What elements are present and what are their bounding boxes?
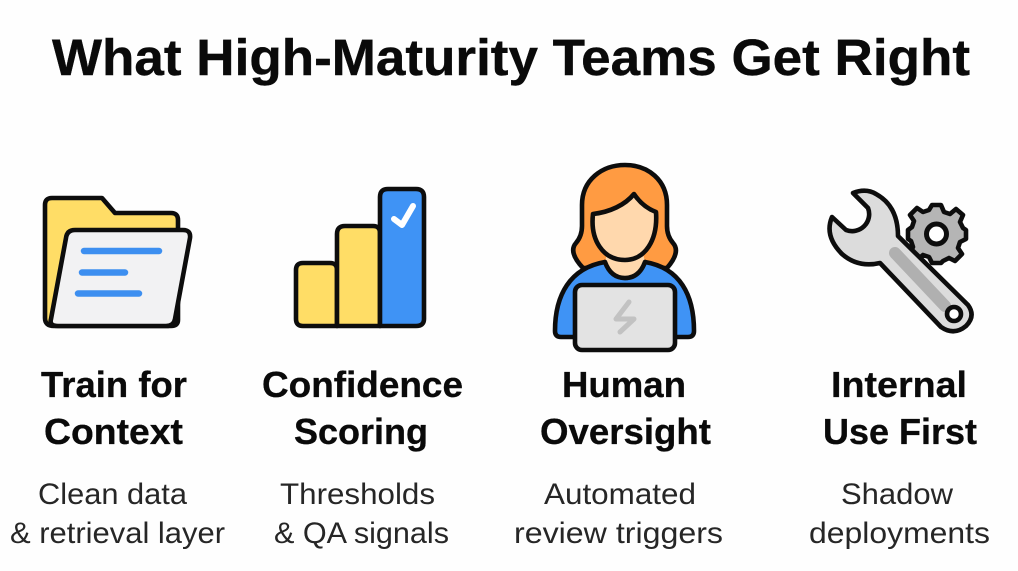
description: internal use first <box>809 478 990 550</box>
description: human oversight: Automated <box>544 478 696 511</box>
description: train for context <box>10 478 225 550</box>
heading: internal use first: Use First <box>823 411 977 452</box>
description: confidence scoring <box>274 478 449 550</box>
description: confidence scoring: & QA signals <box>274 517 449 550</box>
heading: human oversight <box>540 364 711 452</box>
column: confidence scoring <box>262 189 463 550</box>
heading: train for context: Context <box>44 411 183 452</box>
icon: wrench and gear <box>830 191 972 331</box>
heading: train for context: Train for <box>41 364 187 405</box>
heading: confidence scoring <box>262 364 463 452</box>
icon: open folder <box>45 198 190 326</box>
description: train for context: & retrieval layer <box>10 517 225 550</box>
icon: person at laptop <box>555 165 694 350</box>
description: internal use first: deployments <box>809 517 990 550</box>
heading: internal use first: Internal <box>831 364 967 405</box>
description: confidence scoring: Thresholds <box>280 478 435 511</box>
heading: train for context <box>41 364 187 452</box>
heading: confidence scoring: Scoring <box>294 411 428 452</box>
heading: human oversight: Oversight <box>540 411 711 452</box>
column: train for context <box>10 198 225 550</box>
column: human oversight <box>514 165 723 550</box>
description: internal use first: Shadow <box>841 478 953 511</box>
heading: confidence scoring: Confidence <box>262 364 463 405</box>
description: human oversight <box>514 478 723 550</box>
description: human oversight: review triggers <box>514 517 723 550</box>
description: train for context: Clean data <box>38 478 187 511</box>
title: What High-Maturity Teams Get Right <box>52 29 970 86</box>
icon: bar chart with check <box>296 189 424 326</box>
heading: internal use first <box>823 364 977 452</box>
heading: human oversight: Human <box>562 364 686 405</box>
column: internal use first <box>809 191 990 550</box>
